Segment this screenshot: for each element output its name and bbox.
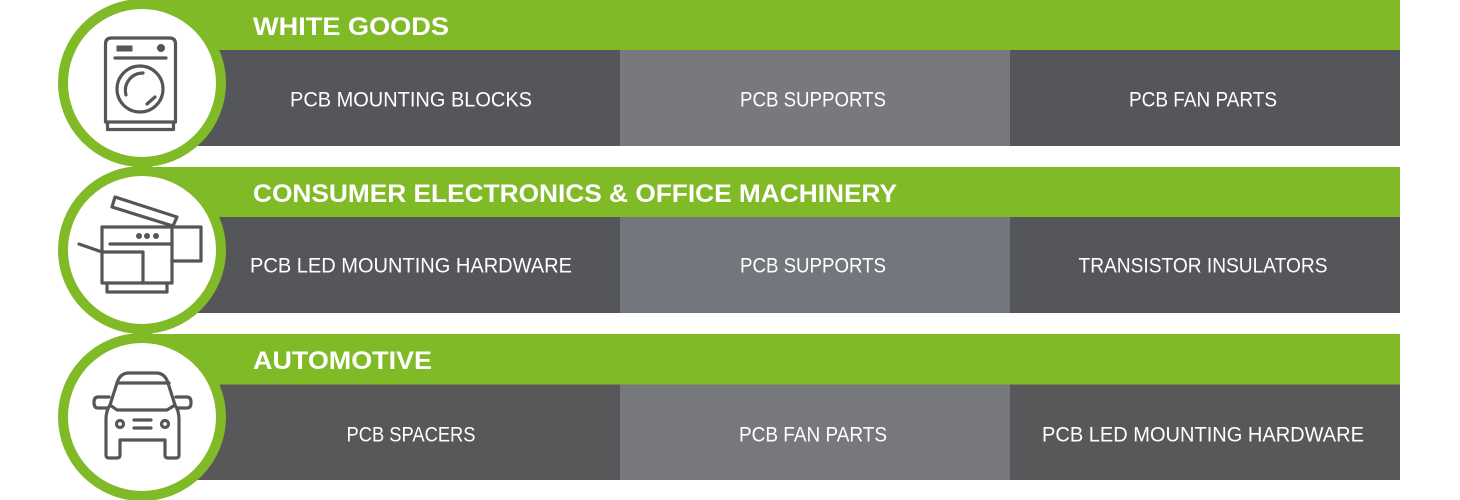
icon: washing machine badge	[63, 4, 221, 162]
panel: consumer electronics	[63, 167, 1400, 329]
cell: PCB supports: PCB SUPPORTS	[740, 254, 886, 278]
icon: car badge	[63, 338, 221, 496]
cell: PCB mounting blocks	[190, 50, 620, 146]
cell: PCB spacers	[190, 384, 620, 480]
cell: PCB fan parts: PCB FAN PARTS	[739, 424, 887, 446]
heading bar: automotive	[142, 334, 1400, 384]
cell: transistor insulators: TRANSISTOR INSULATORS	[1078, 254, 1328, 278]
heading bar: consumer electronics: CONSUMER ELECTRONICS & OFFICE MACHINERY	[253, 180, 897, 208]
cell: PCB supports	[620, 217, 1010, 313]
cell: PCB spacers: PCB SPACERS	[346, 424, 476, 446]
cell: transistor insulators	[1010, 217, 1400, 313]
cell: PCB mounting blocks: PCB MOUNTING BLOCKS	[290, 88, 532, 112]
cell: PCB supports: PCB SUPPORTS	[740, 88, 886, 112]
heading bar: white goods: WHITE GOODS	[253, 13, 449, 41]
heading bar: automotive: AUTOMOTIVE	[253, 347, 432, 375]
panel: automotive	[63, 334, 1400, 496]
cell: PCB fan parts: PCB FAN PARTS	[1129, 88, 1277, 112]
heading bar: consumer electronics	[142, 167, 1400, 217]
heading bar: white goods	[142, 0, 1400, 50]
cell: PCB LED mounting hardware: PCB LED MOUNTING HARDWARE	[1042, 424, 1364, 446]
cell: PCB LED mounting hardware	[1010, 384, 1400, 480]
icon: photocopier badge	[63, 171, 221, 329]
cell: PCB LED mounting hardware	[190, 217, 620, 313]
panel: white goods	[63, 0, 1400, 162]
cell: PCB LED mounting hardware: PCB LED MOUNTING HARDWARE	[250, 254, 572, 278]
cell: PCB fan parts	[620, 384, 1010, 480]
cell: PCB supports	[620, 50, 1010, 146]
cell: PCB fan parts	[1010, 50, 1400, 146]
